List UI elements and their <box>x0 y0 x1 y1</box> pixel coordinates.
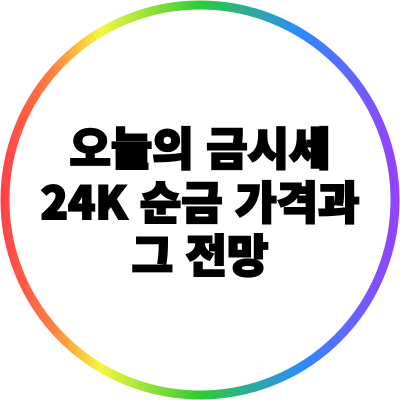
title line 3: 그 전망 <box>132 220 268 285</box>
title line 1: 오늘의 금시세 <box>69 113 330 178</box>
title line 2: 24K 순금 가격과 <box>41 167 359 232</box>
